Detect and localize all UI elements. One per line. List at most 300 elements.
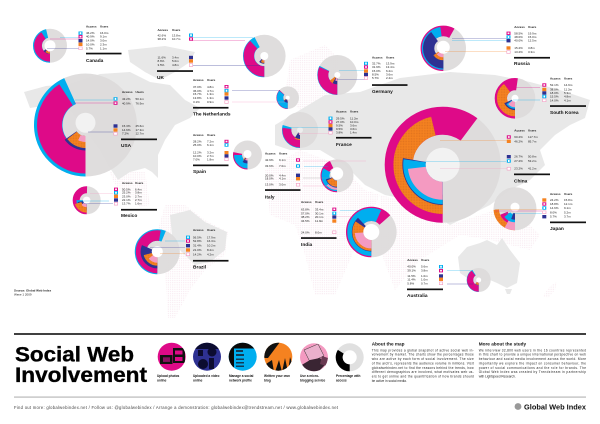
data table: Mexico: 25.2% [122,191,131,195]
data table: Mexico [114,181,157,219]
data table: Russia [506,25,550,67]
data table: Italy: 33.6% [265,164,274,168]
data table: Canada: 14.0% [86,39,95,43]
data table: Italy [265,151,300,200]
leader lines: China [424,140,507,169]
data table: Canada: Access [86,24,97,28]
leader lines: Japan [495,209,542,213]
data table: Canada: 46.2% [86,31,95,35]
text block: more about the study: Global Web Index was created by Trendstream in partnership [479,370,586,374]
data table: Mexico: 22.1% [122,198,131,202]
data table: The Netherlands: The Netherlands [193,112,231,118]
data table: Japan: 15.8m [564,198,573,202]
data table: UK: 11.6% [158,56,166,60]
leader lines: Australia [447,271,473,284]
data table: USA: USA [121,143,132,149]
panel: The Netherlands [193,78,299,118]
data table: France: 29.5% [336,116,345,120]
text block: about the map: be active in social media. [372,379,407,383]
donut chart: Spain [233,140,262,170]
data table: The Netherlands: 37.0% [193,85,202,89]
data table: Australia: 1.0m [421,274,428,278]
text block: more about the study: power of social communications and the role for brands. The [479,366,586,370]
data table: Brazil: 16.3m [207,239,216,243]
data table: China: Users [528,129,537,133]
text block: more about the study: in this chart to provide a unique international perspective on web [479,353,586,357]
data table: Mexico: 13.7% [122,202,131,206]
data table: Japan: 12.1m [564,202,573,206]
data table: France: 11.2m [350,116,359,120]
panel: India [301,200,397,257]
donut chart: Mexico [73,186,101,214]
data table: India: Access [301,200,312,204]
data table: India: 8.0m [315,230,322,234]
data table: Brazil: Users [207,228,216,232]
title: Social Web [15,343,134,367]
panel: China [385,107,550,223]
donut chart: USA [34,74,137,176]
leader lines: Brazil [150,241,185,254]
data table: Italy: Users [279,151,288,155]
data table: USA: 76.9m [136,101,144,105]
data table: Brazil: Brazil [193,264,206,270]
data table: France: 3.6m [350,127,357,131]
leader lines: India [336,210,360,217]
footer links: Find out more: globalwebindex.net / Follow us: @globalwebindex / Arrange a demonstration: globalwebindex@trendstream.net / www.globalwebindex.net [14,405,339,410]
data table: Spain: 7.0% [193,157,200,161]
panel: Canada [33,24,122,64]
data table: Italy: 4.4m [279,173,286,177]
data table: Japan: Japan [550,226,564,232]
text block: about the map: This map provides a global snapshot of active social web in- [372,348,474,352]
data table: Australia: 3.8m [421,269,428,273]
data table: Brazil: 8.2m [207,248,214,252]
data table: Spain: 10.0% [193,154,202,158]
text block: about the map: ers to get online and the quantification of how brands should [372,374,474,378]
data table: India: 63.8% [301,207,310,211]
panel: South Korea [495,76,586,119]
data table: UK: Access [158,28,168,32]
data table: Canada: 10.0% [86,42,95,46]
data table: Italy: 42.9% [265,158,274,162]
data table: Germany: 2.4m [386,76,393,80]
data table: Russia: 3.3m [528,50,535,54]
data table: China [507,129,550,184]
legend icon: upload video [192,342,222,382]
panel: Italy [265,151,366,200]
data table: Mexico: Users [135,181,144,185]
data table: USA: 43.2% [122,97,131,101]
data table: Australia: Australia [407,293,428,299]
donut chart: South Korea [495,78,535,119]
data table: Germany: 13.9m [386,62,395,66]
data table: UK: 8.6% [158,59,165,63]
data table: Mexico: 2.7m [135,198,142,202]
data table: Russia: Russia [514,61,530,67]
data table: Japan: 5.7% [550,215,557,219]
data table: Brazil: Access [193,228,204,232]
data table: Canada: 1.1m [100,46,107,50]
data table: Mexico: 50.5% [122,187,131,191]
text block: about the map: volvement by market. The charts show the percentages those [372,353,474,357]
data table: Spain: 25.0% [193,143,202,147]
data table: France: Access [336,109,347,113]
logo: Global Web Index: Global Web Index [524,402,586,411]
data table: France: 9.5% [336,127,343,131]
data table: Canada: 40.9% [86,35,95,39]
data table: UK: 5.0m [172,59,179,63]
data table: Brazil: 14.2% [193,252,202,256]
legend icon: micro-blogging: blogging service [300,378,326,382]
data table: Japan: 9.1m [564,206,571,210]
data table: The Netherlands: Users [207,78,216,82]
data table: Brazil: 21.0% [193,248,202,252]
data table: The Netherlands: 4.8m [207,85,214,89]
data table: Brazil: 4.2m [207,252,214,256]
leader lines: France [290,128,329,133]
data table: China: 41.2m [528,167,537,171]
data table: Italy: 9.1m [279,158,286,162]
text block: about the map: of the arch's, represents the audience volume in millions. Visit [372,361,474,365]
data table: Mexico: 3.8m [135,191,142,195]
data table: USA: 15.3% [122,124,131,128]
text block: about the map: About the map [372,342,405,347]
data table: Russia: 15.2% [514,46,523,50]
data table: Australia: 11.5% [407,274,416,278]
text block: about the map [372,342,474,383]
panel: Australia [407,258,491,299]
text block: about the map: who are active by each form of social involvement. The size [372,357,474,361]
data table: Germany: 32.7% [372,62,381,66]
title [15,343,147,387]
data table: Brazil: 31.4% [193,244,202,248]
data table: USA: 14.6% [122,128,131,132]
panel: Mexico [73,181,157,219]
data table: Canada: Canada [86,58,104,64]
data table: Russia: 13.2% [514,50,523,54]
data table: China: China [514,178,528,184]
legend icon: percentage with access: Percentage with [336,374,360,378]
data table: Japan: Users [564,192,573,196]
data table: South Korea: 4.1m [564,98,571,102]
data table: India: India [301,242,313,248]
data table: India: 30.1m [315,211,324,215]
panel: Russia [421,25,550,71]
text block: more about the study: with Lightspeed Research. [479,374,516,378]
data table: India [301,200,336,248]
data table: South Korea: South Korea [550,110,579,116]
legend icon: micro-blogging [300,343,328,382]
leader lines: Russia [445,38,507,52]
legend icon: upload video: online [193,378,203,382]
source note: Wave 1 2009 [14,292,32,296]
data table: Canada [78,24,122,64]
data table: India: Users [315,200,324,204]
legend icon: upload video: Uploaded a video [193,374,219,378]
leader lines: Canada [47,38,79,49]
data table: Italy: 3.0m [279,183,286,187]
data table: Russia: 58.5% [514,31,523,35]
footer rule [14,396,586,398]
data table: India: 38.2% [301,215,310,219]
data table: India: 20.1m [315,215,324,219]
data table: Mexico: 6.4m [135,187,142,191]
leader lines: USA [73,100,113,132]
text block: more about the study [479,342,586,378]
data table: India: 34.5% [301,219,310,223]
title: Involvement [15,363,147,387]
legend icon: social network profile: Manage a social [229,374,254,378]
donut chart: Russia [421,26,466,71]
text block: about the map: globalwebindex.net to find the reasons behind the trends, how [372,366,474,370]
data table: Italy: 18.0% [265,177,274,181]
data table: Mexico: 1.6m [135,202,142,206]
data table: Australia: 11.4% [407,277,416,281]
data table: China: 23.2% [514,167,523,171]
data table: Russia: 19.9m [528,31,537,35]
legend icon: upload photos [157,343,186,382]
leader lines: The Netherlands [232,90,285,102]
data table: USA: 7.2% [122,132,129,136]
text block: more about the study: importantly we explore the impact on consumer behaviour, the [479,361,586,365]
data table: China: 53.2m [528,159,537,163]
data table: Mexico: 2.7m [135,194,142,198]
data table: Canada: 5.7% [86,46,93,50]
data table: Canada: 9.1m [100,35,107,39]
panel: Germany [317,55,408,95]
text block: more about the study: More about the study [479,342,526,347]
data table: South Korea: 38.0% [550,88,559,92]
panel: Spain [193,133,262,175]
data table: India: 11.9m [315,219,324,223]
data table: Germany [364,55,408,95]
panel: Japan [494,187,586,232]
data table: Canada: 16.0m [100,31,109,35]
data table: Japan: 14.6% [550,206,559,210]
data table: Russia: 48.0% [514,35,523,39]
data table: France: 10.0m [350,120,359,124]
legend icon: percentage with access: access [336,378,347,382]
data table: France: 3.8% [336,131,343,135]
data table: Germany: Access [372,55,383,59]
data table: Australia: 40.0% [407,265,416,269]
data table: UK: 38.2% [158,37,166,41]
data table: Australia: 5.6m [421,265,428,269]
data table: France: 3.6m [350,124,357,128]
data table: Spain: 12.2% [193,151,202,155]
data table: Germany: 5.7% [372,76,379,80]
data table: Japan: Access [550,192,561,196]
data table: Japan: 8.0% [550,210,557,214]
data table: Canada: 2.3m [100,42,107,46]
data table: UK: 10.7m [172,37,181,41]
data table: Spain: 1.8m [207,157,214,161]
data table: Australia [407,258,443,299]
donut chart: France [282,112,318,148]
data table: South Korea: 52.1% [550,83,559,87]
data table: Canada: Users [100,24,109,28]
data table: Brazil: 56.5% [193,235,202,239]
donut chart: The Netherlands [276,86,299,109]
data table: UK: 42.6% [158,34,166,38]
data table: South Korea: Access [550,76,561,80]
panel: USA [34,74,157,176]
data table: South Korea [542,76,586,116]
data table: Italy: 7.0m [279,164,286,168]
data table: Brazil: 17.9m [207,235,216,239]
data table: China: 85.7m [528,139,537,143]
data table: Canada: 3.0m [100,39,107,43]
leader lines: Italy [303,161,366,186]
data table: Australia: 0.7m [421,281,428,285]
legend icon: blog: blog [264,378,271,382]
data table: USA: 25.6m [136,124,144,128]
legend icon: social network profile: network profile [229,378,252,382]
data table: Germany: 13.4m [386,65,395,69]
data table: Japan: 3.7m [564,215,571,219]
donut chart: Brazil [135,229,180,274]
data table: UK: 3.4m [172,56,179,60]
data table: South Korea: 5.3m [564,91,571,95]
data table: Brazil [186,228,228,270]
text block: about the map: different demographics are involved, what motivates web us- [372,370,474,374]
data table: South Korea: 11.2m [564,88,573,92]
data table: Spain: 2.7m [207,154,214,158]
data table: USA: 50.1m [136,97,144,101]
data table: Spain: Spain [193,169,206,175]
legend icon: percentage with access [336,343,364,382]
data table: Germany: 3.6m [386,72,393,76]
data table: Spain: 7.2m [207,140,214,144]
data table: Brazil: 52.8% [193,239,202,243]
data table: South Korea: Users [564,76,573,80]
donut chart: UK [243,35,286,77]
data table: France [328,109,372,148]
donut chart: Canada [33,29,67,63]
panel: Brazil [135,228,228,274]
data table: South Korea: 4.8m [564,94,571,98]
donut chart: Germany [317,55,357,95]
legend icon: blog [264,342,293,382]
data table: Germany: Users [386,55,395,59]
data table: Germany: 31.9% [372,65,381,69]
data table: Australia: Access [407,258,418,262]
data table: Japan: 24.2% [550,198,559,202]
world map background [24,45,590,318]
data table: USA [114,90,157,149]
data table: Australia: 39.1% [407,269,416,273]
data table: Japan [542,192,586,232]
data table: The Netherlands: 3.1% [193,100,200,104]
donut chart: China [385,107,501,223]
leader lines: UK [192,38,260,65]
data table: The Netherlands: 0.9m [207,100,214,104]
data table: Russia: 15.0m [528,35,537,39]
data table: USA: 40.9% [122,101,131,105]
data table: Spain: 6.1m [207,143,214,147]
data table: The Netherlands [193,78,231,118]
data table: Germany: Germany [372,89,393,95]
data table: China: Access [514,129,525,133]
data table: UK: UK [157,75,164,81]
text block: more about the study: We interview 32,800 web users in the 16 countries represented [479,348,586,352]
donut chart: India [346,207,397,257]
bottom heading rule [14,333,586,335]
data table: USA: 17.3m [136,128,144,132]
data table: UK: 3.5% [158,63,165,67]
leader lines: Germany [337,70,365,79]
data table: The Netherlands: 1.3m [207,92,214,96]
data table: The Netherlands: 1.3m [207,96,214,100]
leader lines: South Korea [510,88,540,100]
data table: China: 117.7m [528,135,538,139]
data table: The Netherlands: Access [193,78,204,82]
data table: Germany: 15.0% [372,69,381,73]
data table: The Netherlands: 15.7% [193,92,202,96]
data table: India: 57.0% [301,211,310,215]
data table: South Korea: 15.5% [550,94,559,98]
data table: USA: Access [122,90,133,94]
data table: South Korea: 14.9m [564,83,573,87]
legend icon: blog: Written your own [264,374,290,378]
data table: South Korea: 18.0% [550,91,559,95]
data table: Spain [193,133,228,175]
data table: China: 60.2% [514,135,523,139]
data table: France: 27.0% [336,120,345,124]
data table: UK: 4.8m [172,63,179,67]
data table: Spain: Access [193,133,204,137]
data table: Australia: 1.0m [421,277,428,281]
data table: India: 33.4m [315,207,324,211]
source note: Source: Global Web Index [14,288,51,292]
data table: Italy: Access [265,151,276,155]
data table: Germany: 8.5% [372,72,379,76]
data table: Russia: 12.5m [528,39,537,43]
data table: The Netherlands: 13.8% [193,96,202,100]
donut chart: Japan [494,187,536,230]
data table: Italy: 13.0% [265,183,274,187]
data table: Russia: Users [528,25,537,29]
data table: China: 50.8m [528,155,537,159]
data table: India: 24.0% [301,230,310,234]
data table: UK: Users [172,28,181,32]
legend icon: upload photos: Upload photos [157,374,180,378]
data table: Italy: 4.1m [279,177,286,181]
data table: Russia: Access [514,25,525,29]
data table: Brazil: 10.2m [207,244,216,248]
data table: South Korea: 14.0% [550,98,559,102]
data table: Italy: Italy [265,194,275,200]
data table: France: France [336,142,352,148]
legend icon: micro-blogging: Use a micro- [300,374,319,378]
legend icon: upload photos: online [157,378,167,382]
leader lines: Mexico [80,194,113,204]
data table: Spain: Users [207,133,216,137]
data table: Italy: 20.0% [265,173,274,177]
panel: UK [157,28,286,81]
legend icon: social network profile [228,342,258,382]
source note [14,288,51,296]
data table: China: 27.2% [514,159,523,163]
data table: France: Users [350,109,359,113]
data table: UK: 13.8m [172,34,181,38]
donut chart: Italy [320,159,354,192]
data table: China: 46.2% [514,139,523,143]
data table: Mexico: 23.0% [122,194,131,198]
data table: Mexico: Mexico [121,213,137,219]
data table: Australia: Users [421,258,430,262]
data table: Japan: 18.8% [550,202,559,206]
